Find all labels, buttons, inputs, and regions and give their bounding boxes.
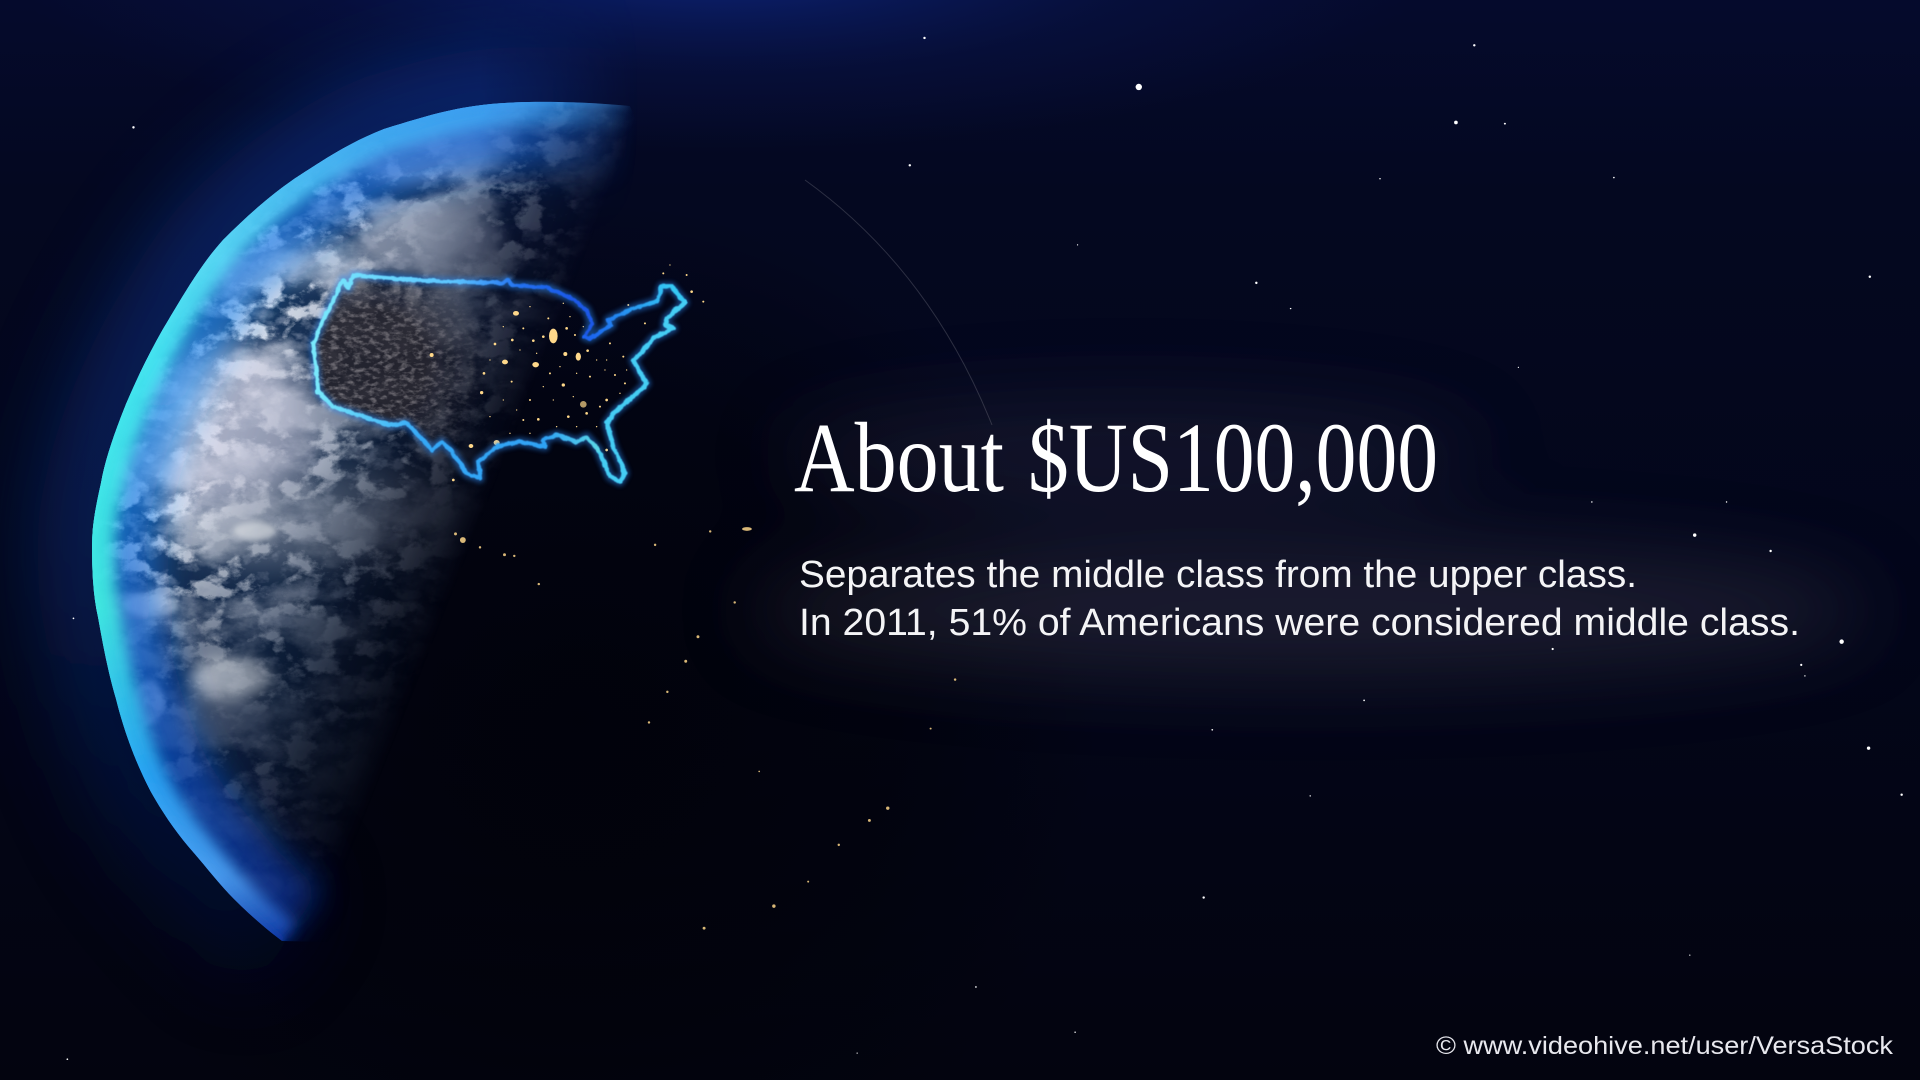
inner blue atmosphere [92,102,630,941]
copyright credit: © www.videohive.net/user/VersaStock [1436,1032,1894,1060]
daylight ocean [118,154,562,857]
text glow [750,400,1870,675]
cloud cover [92,102,615,892]
atmosphere halo [92,102,630,941]
outline glow [313,275,685,482]
bright limb line [92,102,630,941]
US land texture [315,277,482,444]
title [794,402,1438,513]
description [799,554,1800,644]
amount: $US100,000 [1028,402,1438,513]
great lakes and north east border [585,287,685,338]
USA outline [313,275,685,482]
line two: In 2011, 51% of Americans were considered middle class. [799,602,1800,644]
west and north border [313,275,592,392]
city lights [430,264,956,930]
line one: Separates the middle class from the upper class. [799,554,1637,596]
faint orbit arc [805,180,992,425]
southern border [318,392,598,478]
east coast [598,303,685,482]
lower hemisphere dimming [97,534,402,898]
cyan rim light [92,102,630,941]
globe [92,102,632,942]
word: About: About [794,402,1004,513]
